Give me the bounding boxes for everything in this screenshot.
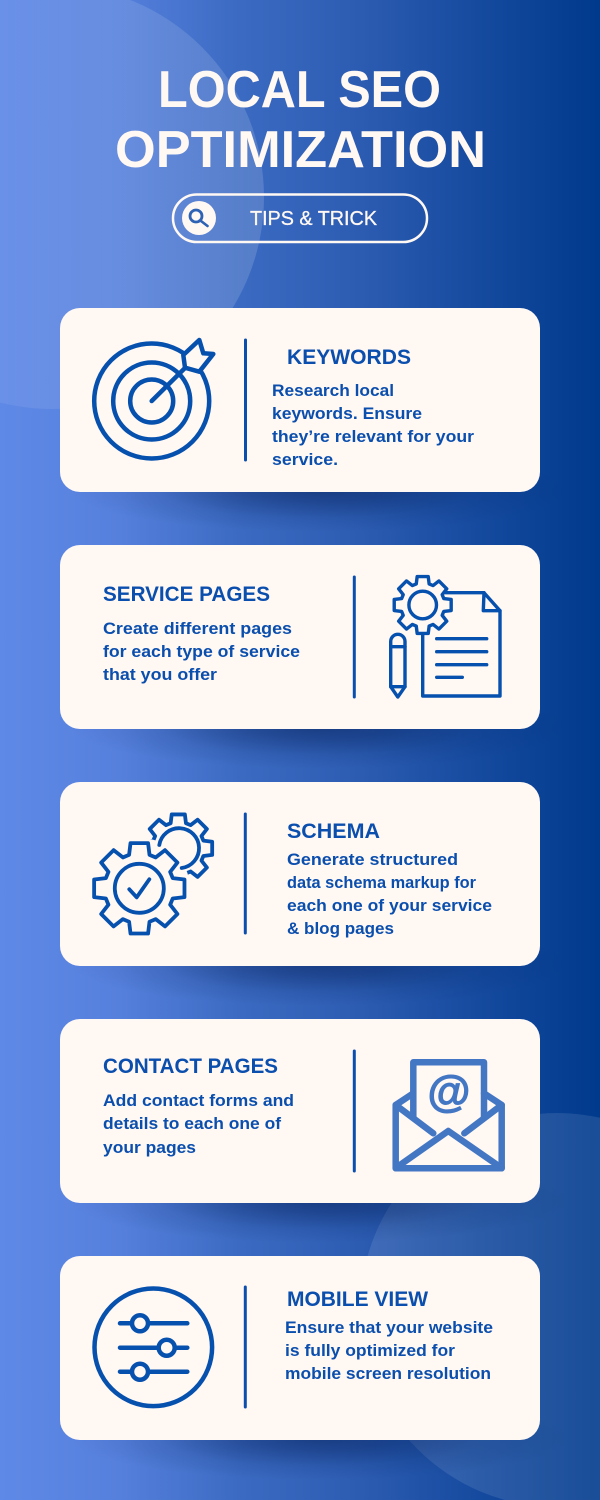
contact text <box>103 1091 294 1157</box>
schema text: & blog pages <box>287 919 394 938</box>
service text: that you offer <box>103 665 217 684</box>
mobile heading: MOBILE VIEW <box>287 1288 428 1311</box>
panel: mobile view <box>60 1256 570 1480</box>
schema text <box>287 850 492 938</box>
pill label: TIPS & TRICK <box>250 208 378 230</box>
mobile text <box>285 1318 493 1383</box>
icon: document, gear, pencil <box>391 577 500 697</box>
service text <box>103 619 300 684</box>
search pill <box>173 194 427 242</box>
schema heading: SCHEMA <box>287 820 380 843</box>
keywords text: keywords. Ensure <box>272 404 422 423</box>
title <box>115 61 486 179</box>
contact text: Add contact forms and <box>103 1091 294 1110</box>
contact heading: CONTACT PAGES <box>103 1055 278 1078</box>
panel: keywords <box>60 308 570 532</box>
panel: service pages <box>60 545 570 769</box>
title: LOCAL SEO <box>158 61 441 119</box>
service heading: SERVICE PAGES <box>103 583 270 606</box>
mobile text: Ensure that your website <box>285 1318 493 1337</box>
icon: gears with check <box>89 814 212 939</box>
mobile text: is fully optimized for <box>285 1341 455 1360</box>
panel: contact pages <box>60 1019 570 1243</box>
icon: envelope with at sign <box>396 1062 502 1168</box>
panel: schema <box>60 782 570 1006</box>
contact text: your pages <box>103 1138 196 1157</box>
service text: for each type of service <box>103 642 300 661</box>
keywords text: Research local <box>272 381 394 400</box>
keywords text: service. <box>272 450 338 469</box>
keywords heading: KEYWORDS <box>287 346 411 369</box>
schema text: Generate structured <box>287 850 458 869</box>
icon: sliders in circle <box>94 1288 212 1406</box>
icon: magnifier <box>182 201 216 235</box>
icon: target with arrow <box>94 340 213 458</box>
mobile text: mobile screen resolution <box>285 1364 491 1383</box>
schema text: each one of your service <box>287 896 492 915</box>
title: OPTIMIZATION <box>115 121 486 179</box>
schema text: data schema markup for <box>287 873 476 892</box>
keywords text <box>272 381 474 469</box>
icon: envelope with at sign: @ <box>428 1067 470 1116</box>
contact text: details to each one of <box>103 1114 281 1133</box>
service text: Create different pages <box>103 619 292 638</box>
keywords text: they’re relevant for your <box>272 427 474 446</box>
